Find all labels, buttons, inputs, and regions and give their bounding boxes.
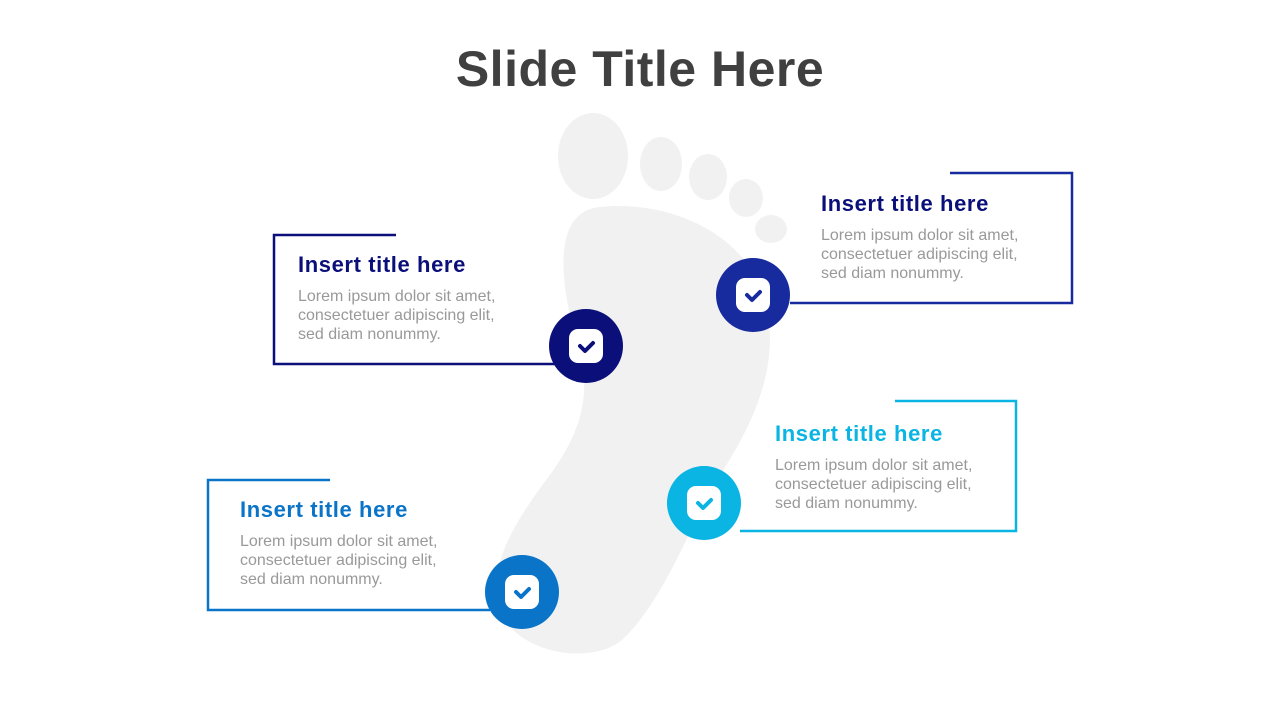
title: Slide Title Here [456, 41, 824, 97]
text block: consectetuer adipiscing elit, [298, 307, 495, 324]
heading: Insert title here [775, 421, 943, 446]
icon: check [549, 309, 623, 383]
heading: Insert title here [298, 252, 466, 277]
footprint [496, 113, 787, 653]
heading: Insert title here [821, 191, 989, 216]
panel: top-left [274, 235, 623, 383]
text block: sed diam nonummy. [298, 326, 441, 343]
icon: check [667, 466, 741, 540]
text block: consectetuer adipiscing elit, [775, 476, 972, 493]
text block: sed diam nonummy. [240, 571, 383, 588]
text block: Lorem ipsum dolor sit amet, [775, 457, 972, 474]
icon: check [485, 555, 559, 629]
text block: Lorem ipsum dolor sit amet, [298, 288, 495, 305]
heading: Insert title here [240, 497, 408, 522]
panel: middle-right [667, 401, 1016, 540]
text block: Lorem ipsum dolor sit amet, [240, 533, 437, 550]
text block: Lorem ipsum dolor sit amet, [821, 227, 1018, 244]
text block: sed diam nonummy. [775, 495, 918, 512]
text block: sed diam nonummy. [821, 265, 964, 282]
panel: top-right [716, 173, 1072, 332]
icon: check [716, 258, 790, 332]
panel: bottom-left [208, 480, 559, 629]
text block: consectetuer adipiscing elit, [240, 552, 437, 569]
text block: consectetuer adipiscing elit, [821, 246, 1018, 263]
